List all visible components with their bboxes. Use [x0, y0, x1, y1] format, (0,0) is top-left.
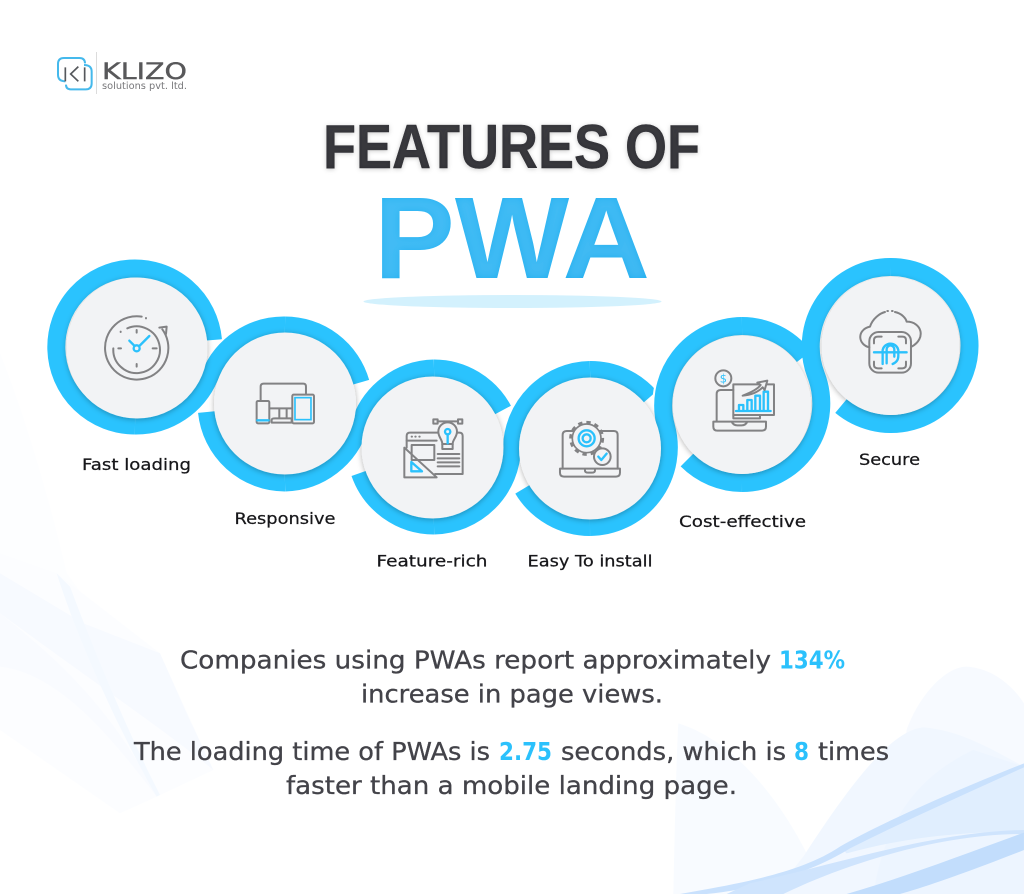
logo tagline: solutions pvt. ltd.: [102, 81, 187, 92]
logo wordmark: KLIZO: [102, 60, 187, 85]
icon: devices: [257, 384, 314, 423]
background waves: right: [673, 667, 1024, 894]
icon: secure cloud: [860, 311, 921, 373]
label: secure: Secure: [859, 450, 920, 469]
text block: page views statistic: Companies using PWAs report approximately: [180, 646, 771, 674]
text block: loading time statistic: [133, 737, 889, 800]
circle: feature-rich: [362, 376, 504, 518]
text block: loading time statistic: The loading time of PWAs is: [133, 737, 490, 766]
icon: clock: [105, 316, 168, 380]
circle: easy to install: [519, 378, 661, 520]
circle: fast loading: [66, 278, 208, 418]
logo icon: [58, 58, 92, 89]
circle: cost-effective: [673, 336, 811, 474]
circle: responsive: [214, 332, 356, 474]
label: cost-effective: Cost-effective: [679, 512, 806, 531]
logo: [58, 52, 187, 94]
ribbon rings: [56, 267, 970, 527]
title underline ellipse: [364, 295, 662, 308]
icon: laptop with chart: [713, 370, 774, 431]
label: responsive: Responsive: [234, 509, 336, 528]
title: PWA: PWA: [374, 173, 650, 303]
text block: loading time statistic: times: [818, 737, 889, 766]
text block: loading time statistic: faster than a mobile landing page.: [286, 771, 737, 800]
icon: laptop with gear: [560, 422, 620, 477]
text block: page views statistic: increase in page views.: [361, 680, 663, 708]
text block: loading time statistic: 8: [794, 737, 809, 766]
text block: page views statistic: 134%: [779, 646, 845, 674]
text block: page views statistic: [180, 646, 845, 708]
label: feature-rich: Feature-rich: [376, 552, 488, 570]
icon: design tools: [404, 419, 463, 477]
circle: secure: [822, 277, 960, 415]
title: features of: FEATURES OF: [323, 113, 700, 182]
label: fast loading: Fast loading: [82, 455, 191, 474]
text block: loading time statistic: 2.75: [499, 737, 552, 766]
text block: loading time statistic: seconds, which is: [561, 737, 786, 766]
label: easy to install: Easy To install: [528, 552, 652, 570]
background waves: left: [0, 353, 213, 813]
icon: laptop with chart: $: [720, 371, 727, 385]
